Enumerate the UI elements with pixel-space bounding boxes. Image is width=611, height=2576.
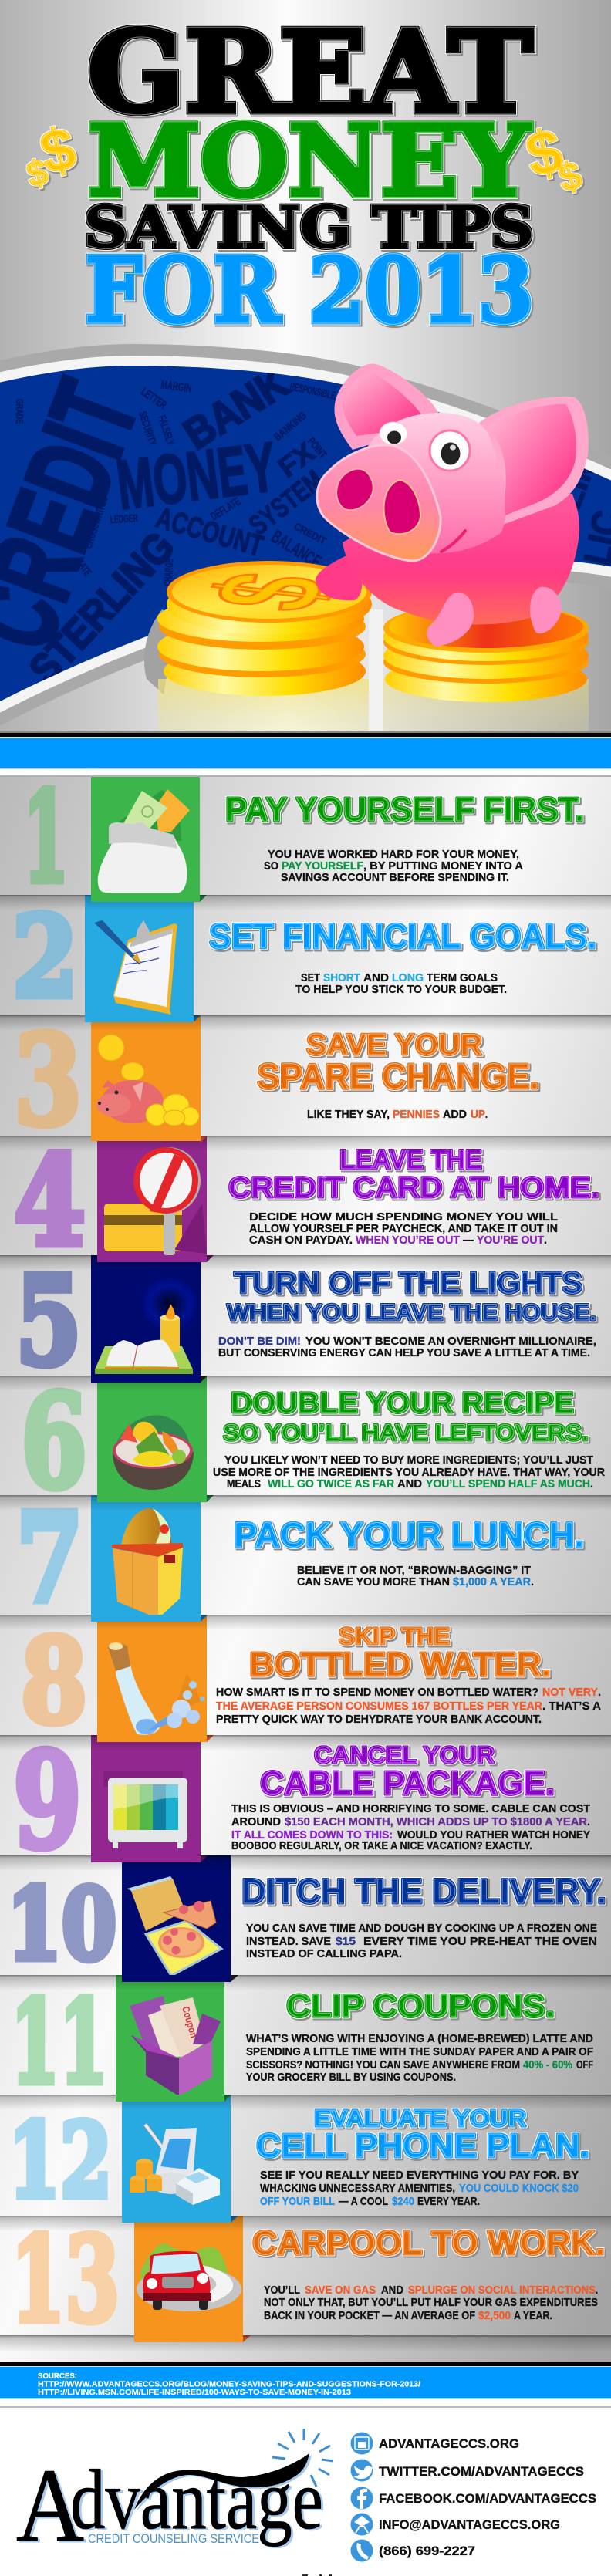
number 9: 9	[13, 1724, 82, 1879]
icon tile	[97, 1136, 207, 1262]
logo wordmark	[16, 2448, 323, 2564]
icon: television	[103, 1771, 187, 1848]
contact: twitter	[350, 2460, 584, 2481]
heading: SAVE YOUR	[306, 1028, 482, 1062]
contact: phone	[350, 2540, 475, 2561]
pig right ear	[479, 397, 589, 525]
icons: dollar signs	[22, 113, 586, 201]
icon tile	[122, 1855, 231, 1982]
body: PAY YOURSELF	[282, 860, 363, 873]
body: DECIDE HOW MUCH SPENDING MONEY YOU WILL	[249, 1211, 558, 1224]
body: BACK IN YOUR POCKET — AN AVERAGE OF	[264, 2310, 475, 2322]
icon: food bowl	[113, 1415, 194, 1490]
body: BUT CONSERVING ENERGY CAN HELP YOU SAVE A LITTLE AT A TIME.	[218, 1347, 590, 1359]
body: YOU’RE OUT	[477, 1234, 544, 1247]
tile fold	[201, 1615, 208, 1622]
body: WILL GO TWICE AS FAR	[268, 1478, 394, 1491]
banner swoosh with word cloud: STERLING	[21, 523, 184, 693]
body: YOU LIKELY WON’T NEED TO BUY MORE INGREDIENTS; YOU’LL JUST	[224, 1454, 593, 1467]
contact: facebook: FACEBOOK.COM/ADVANTAGECCS	[379, 2492, 596, 2506]
pig left ear	[334, 364, 438, 450]
tile 6 cap	[97, 1495, 207, 1502]
tip 3	[14, 1008, 539, 1153]
icons: dollar signs: $	[554, 153, 586, 201]
banner swoosh with word cloud: SYSTEM	[243, 464, 329, 541]
body: SEE IF YOU REALLY NEED EVERYTHING YOU PAY FOR. BY	[260, 2169, 579, 2182]
icon: envelope	[350, 2514, 373, 2535]
icon tile	[122, 2095, 231, 2223]
banner swoosh with word cloud: BALANCE	[268, 526, 324, 572]
body: .	[531, 1576, 534, 1588]
number 4: 4	[14, 1128, 86, 1274]
pig left nostril	[336, 469, 373, 510]
body: IT ALL COMES DOWN TO THIS:	[231, 1829, 393, 1842]
title: SAVING TIPS	[84, 194, 534, 261]
body: INSTEAD OF CALLING PAPA.	[246, 1948, 402, 1960]
tip 7	[16, 1487, 584, 1630]
body: WHAT’S WRONG WITH ENJOYING A (HOME-BREWED) LATTE AND	[246, 2033, 593, 2045]
footer background	[0, 2408, 611, 2576]
heading: CELL PHONE PLAN.	[256, 2128, 589, 2165]
pig mouth	[441, 531, 465, 552]
body: SHORT	[323, 972, 360, 984]
contact: email	[350, 2514, 560, 2535]
heading: CANCEL YOUR	[314, 1741, 495, 1768]
body: PRETTY QUICK WAY TO DEHYDRATE YOUR BANK ACCOUNT.	[216, 1713, 542, 1726]
body: .	[544, 1234, 547, 1247]
tile 8 cap	[97, 1735, 207, 1742]
icon: no credit card	[104, 1147, 207, 1255]
heading	[257, 1028, 539, 1096]
body: OFF	[576, 2059, 593, 2071]
heading: SKIP THE	[339, 1622, 450, 1649]
banner swoosh with word cloud: MARGIN	[160, 378, 192, 396]
number 11: 11	[11, 1975, 108, 2110]
icon: lunch bag	[112, 1508, 183, 1619]
tile fold	[207, 1495, 214, 1502]
body: CASH ON PAYDAY.	[249, 1234, 353, 1247]
body: BOOBOO REGULARLY, OR TAKE A NICE VACATION? EXACTLY.	[231, 1840, 532, 1852]
tile fold	[201, 1855, 208, 1862]
body: $2,500	[478, 2310, 511, 2322]
row shadow	[0, 1615, 611, 1630]
contact: website: ADVANTAGECCS.ORG	[379, 2437, 519, 2451]
title: GREAT	[87, 7, 533, 138]
sources band: HTTP://LIVING.MSN.COM/LIFE-INSPIRED/100-WAYS-TO-SAVE-MONEY-IN-2013	[38, 2388, 351, 2397]
tile 13 cap	[134, 2335, 243, 2342]
heading: PAY YOURSELF FIRST.	[225, 791, 584, 829]
body: SPENDING A LITTLE TIME WITH THE SUNDAY PAPER AND A PAIR OF	[246, 2046, 593, 2058]
tile fold	[200, 895, 207, 902]
row shadow	[0, 1975, 611, 1990]
icon tile	[91, 1255, 201, 1383]
body: .	[596, 2284, 598, 2297]
icon: pizza box	[127, 1876, 221, 1976]
body: .	[590, 1478, 593, 1491]
body: — A COOL	[339, 2196, 388, 2208]
tile fold	[194, 1015, 201, 1022]
tile 11 cap	[116, 2095, 224, 2102]
icon: piggy bank	[316, 364, 589, 647]
body: . THAT’S A	[542, 1700, 602, 1713]
banner swoosh with word cloud: CHARGE	[161, 558, 176, 586]
icon tile	[97, 1615, 207, 1742]
pig hand	[316, 549, 363, 600]
icon tile	[91, 777, 200, 902]
tip 12	[8, 2095, 589, 2223]
body: 40% - 60%	[523, 2059, 572, 2071]
row shadow	[0, 1255, 611, 1271]
tips background	[0, 777, 611, 2362]
icon tile	[91, 1735, 201, 1862]
pig right eye	[430, 430, 470, 471]
row shadow	[0, 2095, 611, 2110]
body: UP	[471, 1109, 485, 1121]
icons: dollar signs: $	[22, 151, 52, 195]
body	[249, 1211, 558, 1247]
tip 8	[21, 1612, 602, 1750]
heading: CARPOOL TO WORK.	[252, 2225, 605, 2262]
tile 10 cap	[122, 1975, 231, 1982]
body: SCISSORS? NOTHING! YOU CAN SAVE ANYWHERE FROM	[246, 2059, 520, 2071]
number 5: 5	[15, 1250, 82, 1393]
body: YOUR GROCERY BILL BY USING COUPONS.	[246, 2071, 456, 2084]
body: YOU’LL	[264, 2284, 300, 2297]
heading: EVALUATE YOUR	[314, 2105, 526, 2132]
body	[260, 2169, 579, 2208]
pig snout	[317, 445, 441, 561]
coin stack left	[157, 561, 372, 696]
banner swoosh with word cloud: POINT	[306, 435, 329, 461]
body: AND	[397, 1478, 422, 1491]
body: NOT VERY	[542, 1686, 598, 1699]
number 2: 2	[12, 892, 78, 1023]
number 12: 12	[8, 2101, 112, 2221]
icon: coupons box: Coupon	[180, 2005, 200, 2039]
body: A YEAR.	[514, 2310, 552, 2322]
heading: WHEN YOU LEAVE THE HOUSE.	[227, 1300, 596, 1325]
body: .	[485, 1109, 488, 1121]
icon: bird	[350, 2460, 373, 2481]
heading: PACK YOUR LUNCH.	[234, 1515, 584, 1555]
logo tagline: CREDIT COUNSELING SERVICE	[88, 2532, 259, 2546]
heading: SET FINANCIAL GOALS.	[209, 917, 596, 956]
tile 9 cap	[91, 1855, 201, 1862]
body	[213, 1454, 606, 1491]
banner swoosh with word cloud: SECURITY	[137, 410, 160, 447]
icon: browser	[350, 2432, 373, 2455]
banner swoosh with word cloud: MONEY	[113, 428, 280, 525]
body: ADD	[443, 1109, 467, 1121]
body: , BY PUTTING MONEY INTO A	[363, 860, 524, 873]
tip 11	[11, 1975, 593, 2110]
body: BELIEVE IT OR NOT, “BROWN-BAGGING” IT	[297, 1565, 531, 1577]
body	[264, 2284, 598, 2322]
body: MEALS	[227, 1478, 261, 1491]
row shadow	[0, 1855, 611, 1871]
pig left ear inner	[343, 373, 423, 436]
row shadow	[0, 2216, 611, 2231]
body	[264, 849, 524, 884]
body: $240	[392, 2196, 414, 2208]
sources band: SOURCES:	[38, 2372, 77, 2381]
banner swoosh with word cloud: FALSELY	[156, 414, 177, 447]
number 3: 3	[14, 1008, 82, 1153]
heading	[249, 1622, 551, 1683]
body: .	[598, 1686, 601, 1699]
number 7: 7	[16, 1487, 83, 1630]
row shadow	[0, 1136, 611, 1151]
tile 2 cap	[85, 1015, 194, 1022]
number 8: 8	[21, 1612, 87, 1750]
heading: DITCH THE DELIVERY.	[241, 1872, 606, 1911]
body: HOW SMART IS IT TO SPEND MONEY ON BOTTLED WATER?	[216, 1686, 538, 1699]
heading: BOTTLED WATER.	[249, 1646, 551, 1683]
heading: LEAVE THE	[339, 1145, 482, 1175]
icon tile	[134, 2216, 243, 2342]
coin stack right	[383, 603, 589, 702]
heading	[227, 1267, 596, 1325]
heading	[223, 1387, 589, 1446]
body: AROUND	[231, 1816, 281, 1828]
body: YOU WON’T BECOME AN OVERNIGHT MILLIONAIRE,	[306, 1335, 596, 1348]
icon: water bottle	[108, 1642, 204, 1735]
tip 5	[15, 1250, 596, 1393]
tile fold	[224, 2095, 231, 2102]
body: YOU’LL SPEND HALF AS MUCH	[426, 1478, 590, 1491]
pig right nostril	[383, 480, 420, 534]
body: SAVE ON GAS	[305, 2284, 376, 2297]
body: INSTEAD. SAVE	[246, 1936, 331, 1948]
row shadow	[0, 1735, 611, 1751]
contact: phone: (866) 699-2227	[379, 2544, 475, 2558]
icon: car	[137, 2243, 241, 2311]
icon: f	[350, 2487, 373, 2509]
body: YOU COULD KNOCK $20	[459, 2183, 579, 2195]
banner swoosh with word cloud: RESPONSIBLE	[289, 380, 336, 401]
blue divider band	[0, 731, 611, 777]
heading	[228, 1145, 599, 1204]
banner swoosh with word cloud	[0, 357, 611, 717]
pig right ear inner	[488, 404, 576, 515]
contact: twitter: TWITTER.COM/ADVANTAGECCS	[379, 2465, 584, 2479]
body: TO HELP YOU STICK TO YOUR BUDGET.	[295, 984, 507, 996]
heading	[260, 1741, 555, 1802]
body	[218, 1335, 596, 1359]
body: CAN SAVE YOU MORE THAN	[297, 1576, 450, 1588]
banner swoosh with word cloud: LIMIT	[553, 422, 611, 513]
contact: facebook	[350, 2487, 596, 2509]
body: LIKE THEY SAY,	[307, 1109, 390, 1121]
icon tile	[91, 1495, 201, 1622]
body: ALLOW YOURSELF PER PAYCHECK, AND TAKE IT OUT IN	[249, 1223, 558, 1235]
floor reflections	[158, 609, 589, 731]
heading: TURN OFF THE LIGHTS	[234, 1267, 582, 1300]
tip 6	[21, 1366, 606, 1518]
body: .	[587, 1816, 590, 1828]
tip 13	[11, 2210, 605, 2348]
heading: SO YOU’LL HAVE LEFTOVERS.	[223, 1420, 589, 1446]
icon: piggy and coins	[96, 1035, 199, 1126]
icon: clipboard and pen	[97, 920, 177, 1015]
tip 4	[14, 1128, 599, 1274]
body: OFF YOUR BILL	[260, 2196, 335, 2208]
tile fold	[231, 1975, 238, 1982]
row shadow	[0, 1495, 611, 1511]
tile 1 cap	[91, 895, 200, 902]
body: PENNIES	[393, 1109, 440, 1121]
body: WHEN YOU’RE OUT	[356, 1234, 460, 1247]
tile 3 cap	[91, 1136, 201, 1141]
title	[84, 7, 534, 343]
body	[295, 972, 507, 996]
contact: website	[350, 2432, 519, 2455]
icon tile	[97, 1376, 207, 1502]
body: AND	[363, 972, 389, 984]
tile 7 cap	[91, 1615, 201, 1622]
body: THIS IS OBVIOUS – AND HORRIFYING TO SOME. CABLE CAN COST	[231, 1803, 590, 1815]
body	[216, 1686, 602, 1726]
icon tile	[85, 895, 194, 1022]
logo swoosh	[134, 2453, 309, 2510]
body: THE AVERAGE PERSON CONSUMES 167 BOTTLES PER YEAR	[216, 1700, 543, 1713]
logo rays	[272, 2429, 333, 2487]
tile fold	[207, 1255, 214, 1262]
body: —	[463, 1234, 474, 1247]
sources band	[0, 2362, 611, 2408]
tile 4 cap	[97, 1255, 207, 1262]
body: $15	[336, 1936, 356, 1948]
pig front leg	[427, 593, 474, 647]
logo wordmark: A	[16, 2448, 84, 2564]
body: TERM GOALS	[427, 972, 498, 984]
tile fold	[231, 2216, 238, 2223]
coin shadow on band	[144, 609, 177, 694]
row shadow	[0, 895, 611, 910]
header background	[0, 0, 611, 731]
banner swoosh with word cloud: BANKING	[272, 409, 309, 443]
row shadow	[0, 1015, 611, 1031]
tile fold	[201, 1376, 208, 1383]
heading: CREDIT CARD AT HOME.	[228, 1172, 599, 1204]
pig back leg	[530, 587, 562, 633]
pig left eye	[380, 422, 407, 445]
contact: email: INFO@ADVANTAGECCS.ORG	[379, 2518, 560, 2532]
number 10: 10	[7, 1867, 116, 1982]
body: $150 EACH MONTH, WHICH ADDS UP TO $1800 A YEAR	[285, 1816, 588, 1828]
tile fold	[243, 2335, 251, 2342]
body: YOU HAVE WORKED HARD FOR YOUR MONEY,	[268, 849, 519, 861]
body	[231, 1803, 590, 1852]
body	[297, 1565, 534, 1588]
logo wordmark: dvantage	[70, 2453, 323, 2547]
body: USE MORE OF THE INGREDIENTS YOU ALREADY HAVE. THAT WAY, YOUR	[213, 1467, 606, 1479]
banner swoosh with word cloud: DEFLATE	[208, 495, 243, 523]
body	[246, 1923, 597, 1960]
number 6: 6	[21, 1366, 87, 1518]
sources band: HTTP://WWW.ADVANTAGECCS.ORG/BLOG/MONEY-SAVING-TIPS-AND-SUGGESTIONS-FOR-2013/	[38, 2379, 420, 2389]
number 13: 13	[11, 2210, 120, 2348]
logo: Advantage	[16, 2429, 333, 2564]
icon tile	[91, 1015, 201, 1141]
row shadow	[0, 2335, 611, 2352]
banner swoosh with word cloud: CREDIT	[292, 520, 328, 547]
row shadow	[0, 1376, 611, 1391]
body: EVERY TIME YOU PRE-HEAT THE OVEN	[363, 1936, 597, 1948]
icon: coupons box	[130, 1996, 221, 2096]
heading: SPARE CHANGE.	[257, 1056, 539, 1096]
icons: dollar signs: $	[34, 113, 82, 187]
tip 1	[23, 765, 584, 910]
icon: phone and coins	[130, 2123, 220, 2205]
body: SET	[301, 972, 320, 984]
body: DON’T BE DIM!	[218, 1335, 301, 1348]
heading	[256, 2105, 589, 2165]
tip 2	[12, 892, 596, 1023]
title: FOR 2013	[85, 238, 534, 343]
banner swoosh with word cloud: GRADE	[14, 399, 25, 424]
banner swoosh with word cloud: RATE	[74, 556, 94, 578]
body: LONG	[392, 972, 424, 984]
body	[307, 1109, 488, 1121]
body: SPLURGE ON SOCIAL INTERACTIONS	[408, 2284, 596, 2297]
body: WOULD YOU RATHER WATCH HONEY	[397, 1829, 590, 1842]
icon: candle and book	[95, 1278, 197, 1374]
tip 9	[13, 1724, 590, 1879]
heading: DOUBLE YOUR RECIPE	[231, 1387, 574, 1420]
body	[246, 2033, 593, 2084]
icon: dollar on coin: $	[180, 566, 359, 617]
icon tile	[116, 1975, 224, 2102]
body: $1,000 A YEAR	[453, 1576, 532, 1588]
body: WHACKING UNNECESSARY AMENITIES,	[260, 2183, 455, 2195]
title: MONEY	[88, 103, 531, 218]
tile fold	[207, 1735, 214, 1742]
pig head	[363, 413, 506, 553]
icons: dollar signs: $	[520, 116, 569, 191]
banner swoosh with word cloud: LEDGER	[110, 511, 138, 525]
number 1: 1	[23, 765, 69, 910]
body: EVERY YEAR.	[417, 2196, 480, 2208]
tile fold	[201, 1136, 208, 1143]
banner swoosh with word cloud: FX	[272, 436, 321, 483]
tip 10	[7, 1855, 606, 1982]
tile 12 cap	[122, 2216, 231, 2223]
banner swoosh with word cloud: LETTER	[139, 385, 169, 412]
icon: purse with bills	[98, 789, 190, 893]
tile 5 cap	[91, 1376, 201, 1383]
body: AND	[381, 2284, 403, 2297]
icon: handset	[350, 2540, 373, 2561]
body: SO	[264, 860, 278, 873]
pig body	[343, 494, 579, 625]
body: SAVINGS ACCOUNT BEFORE SPENDING IT.	[281, 872, 509, 884]
banner swoosh with word cloud: CROSSWRITES	[82, 495, 110, 550]
banner swoosh with word cloud: BANK	[175, 357, 296, 458]
body: YOU CAN SAVE TIME AND DOUGH BY COOKING UP A FROZEN ONE	[246, 1923, 597, 1935]
heading: CABLE PACKAGE.	[260, 1765, 555, 1802]
banner swoosh with word cloud: ACCOUNT	[153, 501, 267, 563]
heading: CLIP COUPONS.	[286, 1987, 555, 2024]
